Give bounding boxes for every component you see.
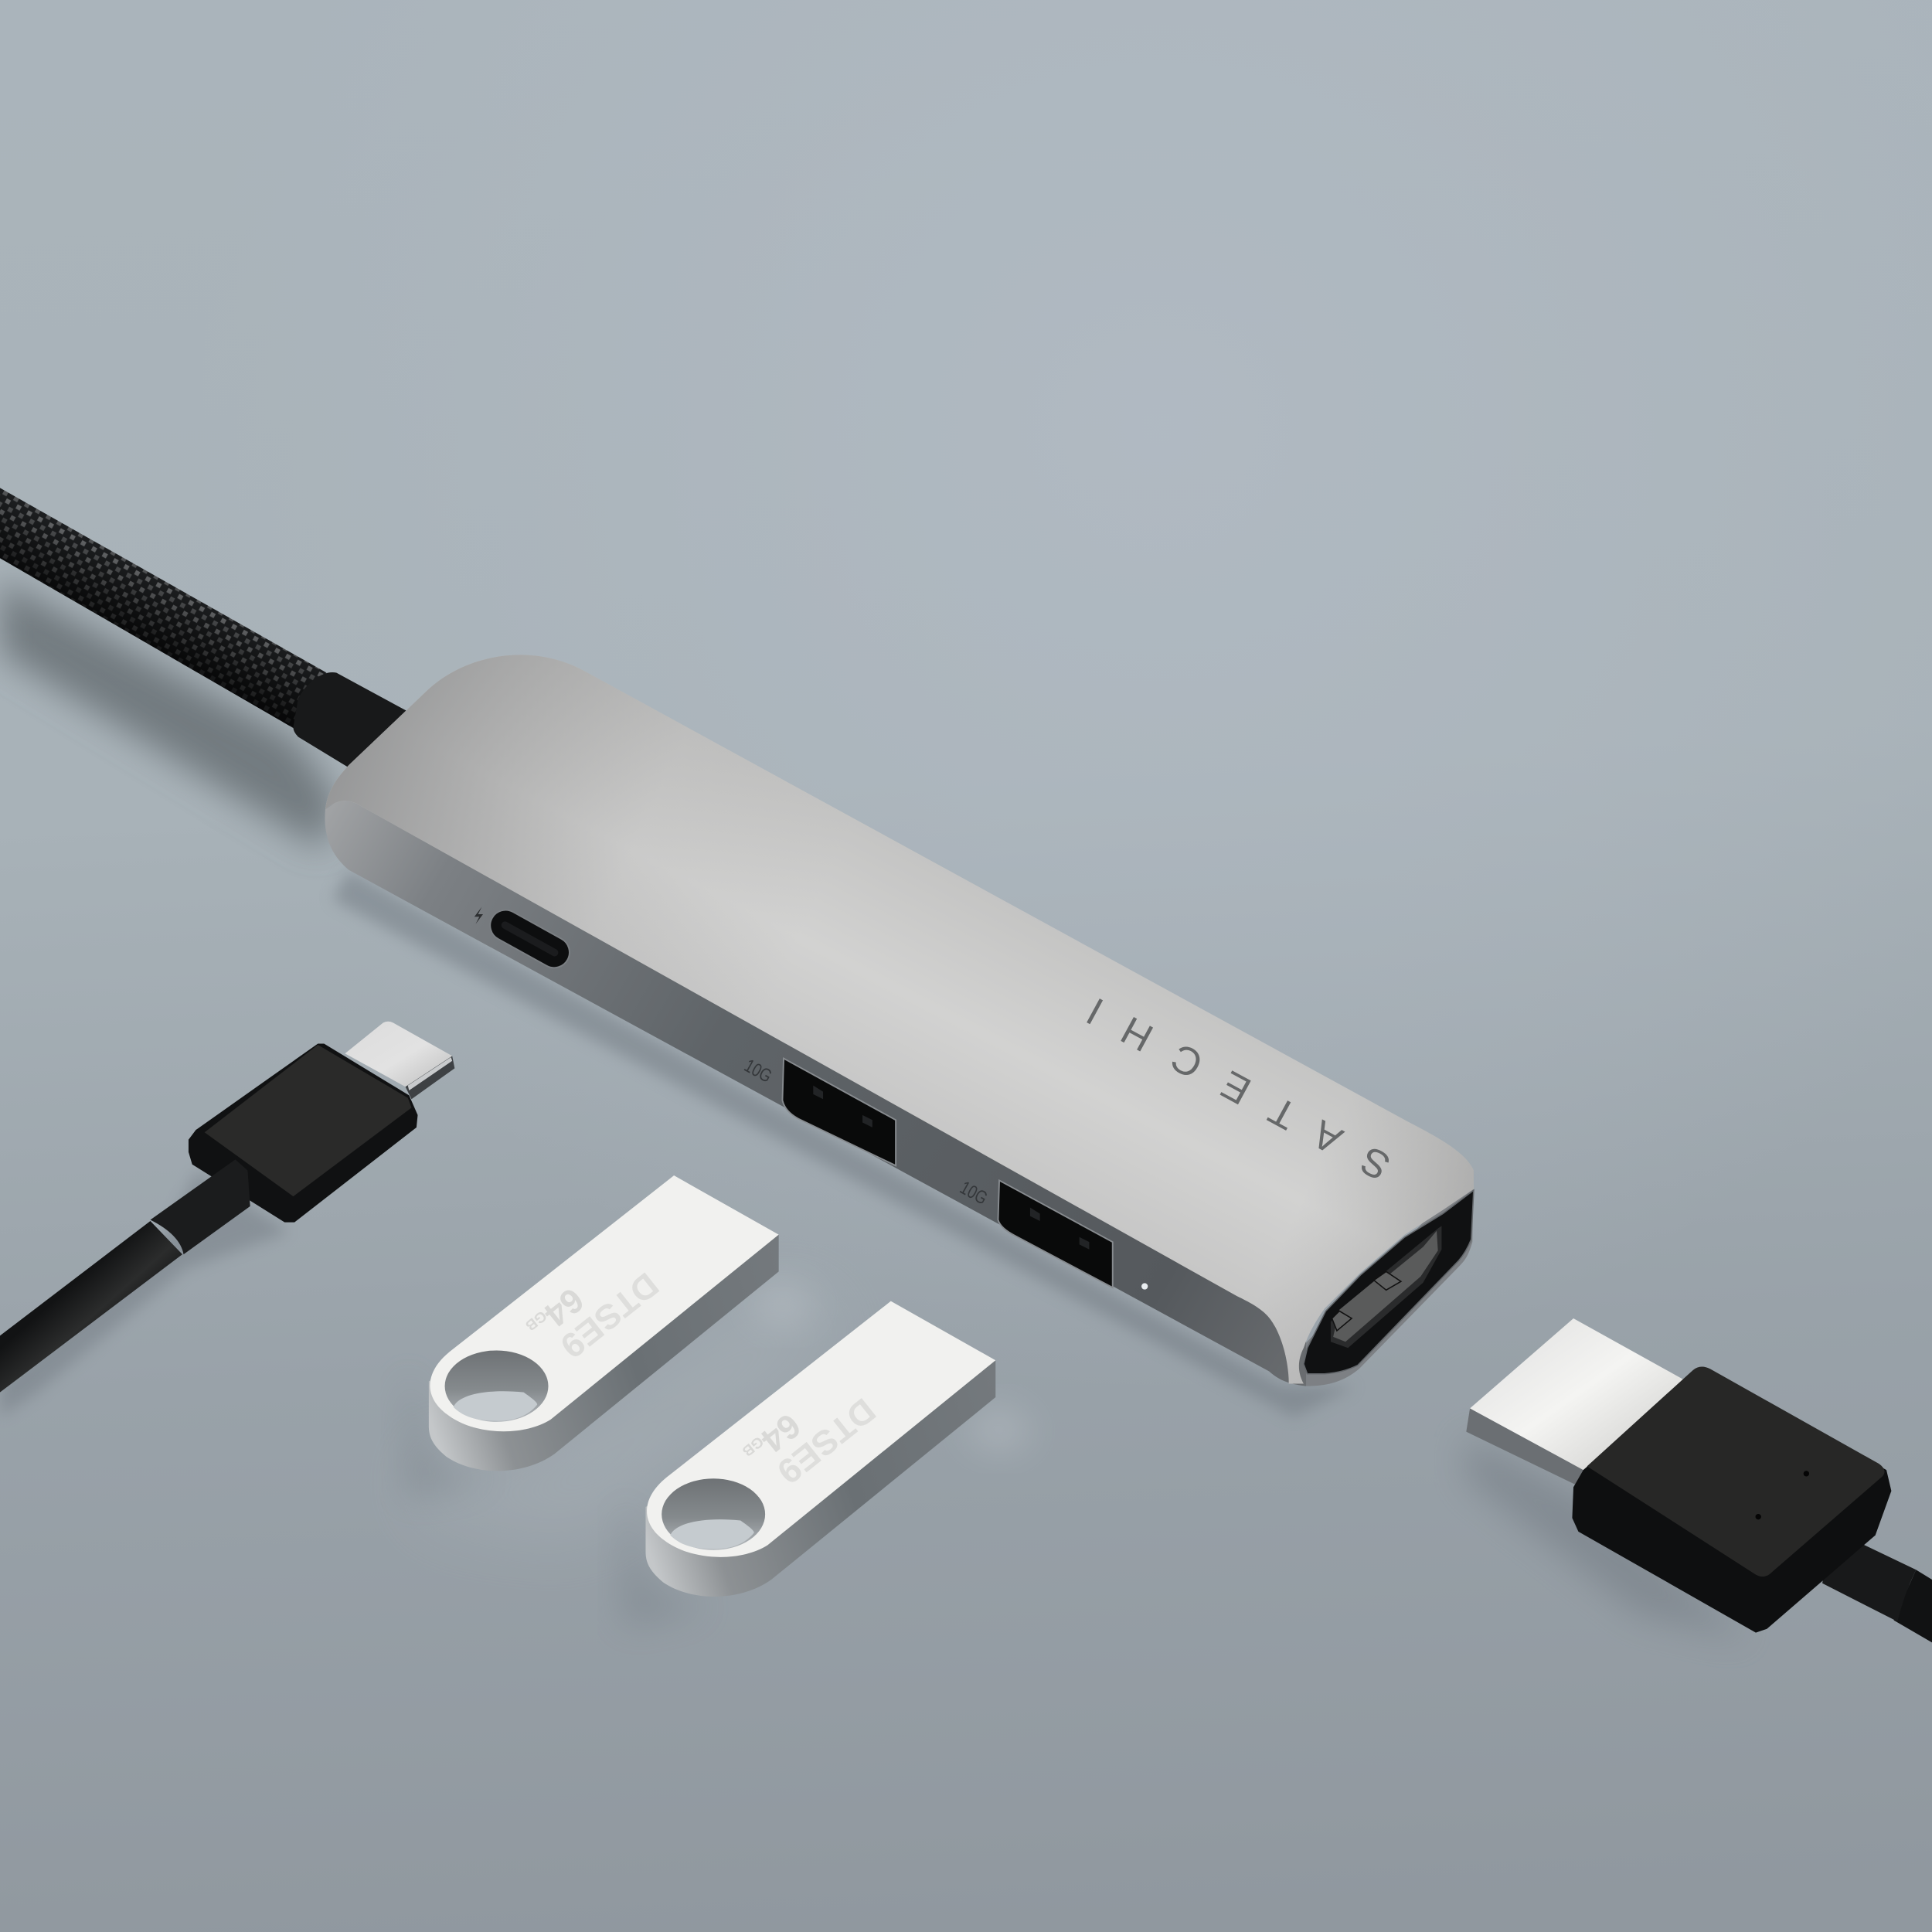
USB-C metal tip <box>345 1022 454 1099</box>
status LED <box>1141 1283 1148 1290</box>
HDMI body top <box>1587 1367 1885 1577</box>
USB-C overmold side <box>189 1043 417 1223</box>
shadows on the surface <box>0 579 1750 1639</box>
hub end rim base <box>1294 1171 1474 1386</box>
USB-C overmold top <box>205 1045 412 1196</box>
drive label: DTSE9: DTSE9 <box>553 1265 665 1366</box>
USB-C cable <box>0 1221 182 1393</box>
HDMI plug <box>1466 1318 1932 1642</box>
HDMI strain relief <box>1822 1529 1916 1621</box>
USB-C strain relief <box>151 1159 250 1254</box>
braided cable <box>0 488 327 730</box>
HDMI port interior <box>1331 1226 1441 1348</box>
hub: aluminium body <box>325 655 1474 1386</box>
HDMI body dot <box>1756 1514 1761 1519</box>
USB-C plug <box>0 1022 454 1393</box>
HDMI cable <box>1894 1570 1932 1642</box>
drive side <box>645 1360 995 1597</box>
HDMI metal side <box>1466 1408 1583 1487</box>
HDMI body dot <box>1804 1471 1809 1477</box>
power port icon <box>474 906 483 924</box>
USB flash drive 1 <box>429 1175 779 1471</box>
USB-A port 1 <box>782 1059 896 1165</box>
hub top face end shading <box>325 655 1474 1383</box>
hub top face <box>325 655 1474 1383</box>
drive label: 64GB: 64GB <box>736 1406 808 1473</box>
SATECHI logo: SATECHI <box>1080 989 1397 1189</box>
HDMI port opening <box>1304 1190 1474 1374</box>
USB-C port <box>485 904 575 973</box>
drive label: DTSE9: DTSE9 <box>770 1390 883 1491</box>
drive hole <box>445 1350 549 1422</box>
drive top <box>647 1301 995 1557</box>
drive top <box>430 1175 779 1431</box>
hub side face <box>325 788 1306 1386</box>
USB-A port 2 <box>998 1180 1113 1287</box>
drive hole <box>662 1478 765 1550</box>
label: 10G: 10G <box>741 1055 776 1087</box>
cable strain relief <box>293 672 409 767</box>
label: 10G: 10G <box>957 1176 992 1209</box>
USB flash drive 2 <box>645 1301 995 1597</box>
drive label: 64GB: 64GB <box>519 1281 590 1348</box>
HDMI metal top <box>1470 1318 1685 1470</box>
drive side <box>429 1235 779 1471</box>
HDMI body side <box>1572 1368 1891 1633</box>
